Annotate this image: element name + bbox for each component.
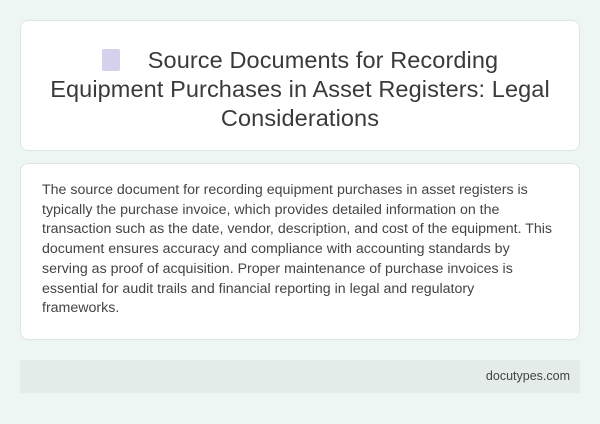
text block: The source document for recording equipment purchases in asset registers is [42, 182, 528, 198]
footer: docutypes.com [486, 369, 570, 383]
panel: description [20, 163, 580, 340]
text block: transaction such as the date, vendor, description, and cost of the equipment. This [42, 221, 552, 237]
footer [20, 360, 580, 393]
icon: document [102, 49, 120, 71]
title: Considerations [221, 105, 379, 131]
panel: title [20, 20, 580, 151]
title: Equipment Purchases in Asset Registers: Legal [50, 76, 550, 102]
text block [42, 182, 552, 316]
title: Source Documents for Recording [148, 47, 498, 73]
text block: frameworks. [42, 300, 119, 316]
text block: essential for audit trails and financial reporting in legal and regulatory [42, 281, 474, 297]
text block: typically the purchase invoice, which provides detailed information on the [42, 202, 499, 218]
text block: serving as proof of acquisition. Proper maintenance of purchase invoices is [42, 261, 513, 277]
title [50, 47, 550, 131]
text block: document ensures accuracy and compliance with accounting standards by [42, 241, 510, 257]
